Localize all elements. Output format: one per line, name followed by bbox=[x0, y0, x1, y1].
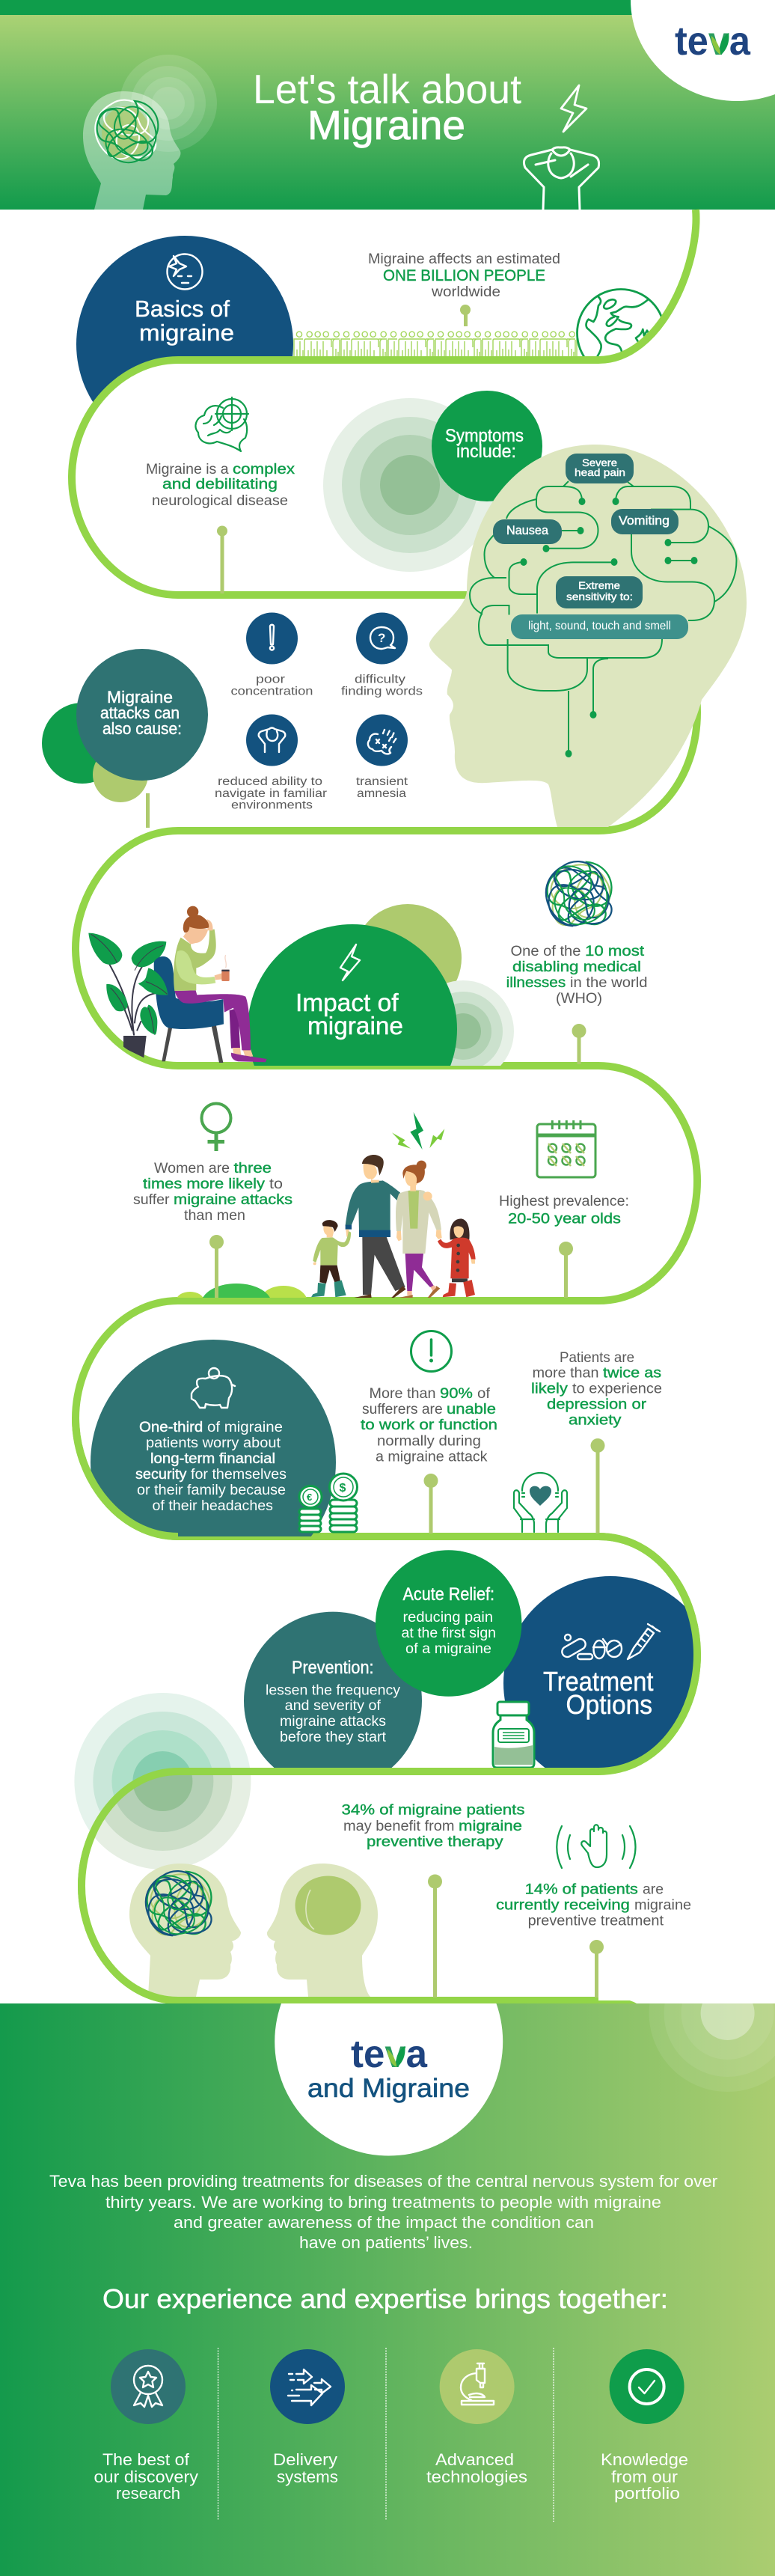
pin bbox=[559, 1242, 573, 1298]
icon: lightning bbox=[340, 944, 360, 980]
text: prevention: and severity of bbox=[285, 1698, 382, 1714]
stat: women three times: than men bbox=[184, 1208, 245, 1224]
icon: medicine bottle bbox=[493, 1702, 534, 1768]
stat: 34 percent: may benefit from bbox=[343, 1819, 459, 1834]
item: reduced ability to navigate: navigate in familiar bbox=[215, 787, 328, 800]
stat: twice as likely bbox=[531, 1350, 662, 1429]
concentric pulse bbox=[446, 980, 514, 1066]
stat: 34 percent: migraine bbox=[459, 1819, 522, 1834]
icon: face with pain bbox=[168, 254, 202, 289]
item: best of discovery research bbox=[94, 2349, 198, 2503]
text: acute relief: reducing pain bbox=[402, 1610, 493, 1626]
head silhouette bbox=[429, 445, 747, 827]
text: prevention bbox=[266, 1658, 401, 1745]
paragraph: thirty years. We are working to bring treatments to people with migraine bbox=[105, 2193, 661, 2212]
stat: women three times bbox=[133, 1161, 292, 1224]
symptoms circle: Symptoms bbox=[445, 426, 524, 446]
stat: 34 percent bbox=[341, 1802, 525, 1850]
paragraph bbox=[49, 2172, 717, 2252]
label: severe head pain bbox=[566, 454, 634, 483]
stat: 14 percent: migraine bbox=[634, 1898, 691, 1914]
stat: one billion people: worldwide bbox=[431, 284, 500, 300]
panel: head with symptoms bbox=[429, 445, 747, 827]
item: reduced ability to navigate: reduced ability to bbox=[218, 775, 322, 788]
panel: women and family bbox=[133, 1102, 628, 1298]
stat: top 10 disabling: illnesses bbox=[506, 975, 570, 991]
heading bbox=[543, 1666, 654, 1720]
white interior and pulse inside loop bbox=[85, 1771, 630, 2000]
stat: one billion people bbox=[368, 251, 560, 300]
heading bbox=[295, 989, 403, 1040]
decorative circles and stem bbox=[42, 703, 150, 828]
stat: 14 percent: are bbox=[643, 1881, 664, 1898]
icon: pills bbox=[560, 1635, 622, 1659]
head silhouette in header bbox=[83, 91, 180, 210]
text: one-third: security bbox=[135, 1467, 191, 1483]
text: prevention: lessen the frequency bbox=[266, 1682, 401, 1699]
item: transient amnesia bbox=[356, 714, 408, 800]
panel: migraine attacks can also cause bbox=[42, 612, 423, 828]
stat: one billion people: Migraine affects an estimated bbox=[368, 251, 560, 267]
item: best of discovery research: The best of bbox=[102, 2450, 190, 2469]
bushes bbox=[177, 1284, 307, 1298]
heading: Impact of bbox=[295, 989, 399, 1016]
concentric pulse in header bbox=[120, 55, 217, 152]
stat: highest prevalence: Highest prevalence: bbox=[499, 1194, 629, 1209]
stat: top 10 disabling: disabling medical bbox=[512, 959, 641, 975]
circuit dots bbox=[521, 498, 697, 757]
label: light, sound, touch and smell bbox=[511, 614, 688, 639]
concentric pulse behind symptoms bbox=[323, 398, 497, 572]
panel: complex disease: and debilitating bbox=[162, 477, 278, 492]
pin bbox=[591, 1438, 604, 1533]
text: one-third: of their headaches bbox=[153, 1498, 273, 1514]
label: vomiting: Vomiting bbox=[619, 513, 670, 528]
item: knowledge from portfolio bbox=[601, 2349, 688, 2503]
olive circle bbox=[354, 904, 462, 1012]
label: vomiting bbox=[611, 509, 678, 534]
pin bbox=[423, 1474, 438, 1533]
text: acute relief: at the first sign bbox=[401, 1626, 496, 1641]
title: Migraine bbox=[307, 102, 465, 148]
icon: globe bbox=[576, 288, 662, 356]
icon: female symbol bbox=[202, 1103, 230, 1151]
footer pulse bbox=[649, 2003, 775, 2092]
heading: Treatment bbox=[543, 1666, 654, 1697]
text: acute relief bbox=[401, 1584, 496, 1657]
footer panel bbox=[0, 2003, 775, 2576]
stat: top 10 disabling: (WHO) bbox=[556, 991, 602, 1007]
stat: twice as likely: anxiety bbox=[569, 1413, 622, 1429]
logo badge: teva bbox=[675, 19, 751, 64]
text: prevention: before they start bbox=[280, 1730, 387, 1745]
logo badge bbox=[631, 0, 775, 101]
paragraph: and greater awareness of the impact the condition can bbox=[174, 2213, 594, 2232]
stat: 14 percent: preventive treatment bbox=[528, 1914, 664, 1929]
stat: more than 90 percent: to work or function bbox=[361, 1417, 497, 1433]
item: difficulty finding words: finding words bbox=[341, 686, 423, 698]
item: delivery systems: systems bbox=[277, 2467, 338, 2486]
icon: tangled brain bbox=[142, 1870, 215, 1942]
stat: women three times: suffer bbox=[133, 1192, 174, 1208]
coin symbols: € bbox=[307, 1492, 312, 1503]
item: reduced ability to navigate bbox=[215, 714, 328, 811]
text: one-third: One-third bbox=[139, 1420, 207, 1435]
text: one-third bbox=[135, 1420, 287, 1514]
icon: hands holding heart bbox=[514, 1473, 567, 1532]
item: transient amnesia: amnesia bbox=[357, 787, 406, 800]
tangled scribble in header head bbox=[95, 100, 158, 162]
title: Let's talk about bbox=[253, 66, 521, 112]
brain circuit lines bbox=[470, 481, 736, 754]
pin bbox=[589, 1940, 604, 1997]
white badge with logo bbox=[275, 2003, 503, 2155]
text: one-third: of migraine bbox=[207, 1420, 283, 1435]
pin bbox=[460, 305, 471, 326]
item: poor concentration: poor bbox=[256, 674, 286, 686]
pin bbox=[572, 1024, 586, 1064]
item: delivery systems bbox=[270, 2349, 345, 2486]
item: knowledge from portfolio: Knowledge bbox=[601, 2450, 688, 2469]
paragraph: Teva has been providing treatments for diseases of the central nervous system for over bbox=[49, 2172, 717, 2191]
label: severe head pain: head pain bbox=[575, 466, 625, 478]
stat: top 10 disabling: 10 most bbox=[585, 944, 645, 959]
stat: more than 90 percent: of bbox=[477, 1386, 491, 1402]
stat: top 10 disabling: in the world bbox=[570, 975, 648, 991]
coin symbols bbox=[307, 1482, 346, 1503]
prevention circle bbox=[244, 1612, 422, 1768]
text: one-third: or their family because bbox=[137, 1483, 286, 1498]
item: poor concentration bbox=[230, 612, 313, 698]
stat: women three times: migraine attacks bbox=[174, 1192, 292, 1208]
section heading: Basics of bbox=[135, 296, 230, 322]
text: prevention: Prevention: bbox=[292, 1658, 374, 1678]
paragraph: have on patients’ lives. bbox=[299, 2233, 473, 2252]
icon: coins bbox=[299, 1474, 358, 1532]
text: one-third: long-term financial bbox=[150, 1451, 275, 1467]
pin bbox=[209, 1235, 224, 1298]
label: nausea: Nausea bbox=[506, 523, 549, 537]
symptoms circle: include: bbox=[456, 442, 516, 462]
item: difficulty finding words: ? bbox=[378, 631, 385, 645]
stat: more than 90 percent: unable bbox=[447, 1402, 496, 1417]
stat: twice as likely: twice as bbox=[603, 1365, 661, 1382]
symptoms circle bbox=[432, 391, 542, 501]
label: extreme sensitivity: Extreme bbox=[578, 579, 620, 591]
label: nausea bbox=[493, 519, 562, 544]
label: severe head pain: Severe bbox=[582, 457, 617, 468]
stat: 34 percent: preventive therapy bbox=[367, 1834, 503, 1850]
item: best of discovery research: research bbox=[116, 2484, 180, 2503]
icon: piggy bank bbox=[192, 1368, 235, 1408]
stat: more than 90 percent: sufferers are bbox=[362, 1402, 447, 1417]
text: Migraine is a bbox=[146, 462, 233, 477]
icon: lightning bolt bbox=[561, 85, 586, 132]
stat: top 10 disabling bbox=[506, 944, 648, 1007]
stat: 34 percent: 34% of migraine patients bbox=[341, 1802, 525, 1819]
stat: one billion people: ONE BILLION PEOPLE bbox=[383, 267, 545, 284]
green heading circle bbox=[248, 924, 457, 1066]
stat: more than 90 percent: a migraine attack bbox=[376, 1449, 488, 1465]
stat: 14 percent bbox=[496, 1881, 691, 1929]
stat: twice as likely: Patients are bbox=[560, 1350, 634, 1366]
white interior of second loop bbox=[72, 360, 673, 595]
section circle bbox=[76, 236, 293, 453]
item: poor concentration: concentration bbox=[230, 686, 313, 698]
label: extreme sensitivity bbox=[556, 576, 643, 608]
label: light, sound, touch and smell: light, sound, touch and smell bbox=[528, 620, 671, 632]
item: difficulty finding words: difficulty bbox=[355, 674, 405, 686]
icon: calm brain bbox=[295, 1875, 361, 1935]
label: extreme sensitivity: sensitivity to: bbox=[566, 590, 633, 602]
text: acute relief: of a migraine bbox=[405, 1641, 491, 1657]
panel: preventive therapy bbox=[74, 1536, 697, 2000]
text: acute relief: Acute Relief: bbox=[402, 1584, 494, 1605]
text: one-third: patients worry about bbox=[146, 1435, 281, 1451]
pin bbox=[217, 525, 227, 593]
item: advanced technologies bbox=[426, 2349, 527, 2486]
text: prevention: migraine attacks bbox=[280, 1714, 386, 1730]
coin symbols: $ bbox=[340, 1482, 346, 1495]
item: transient amnesia: transient bbox=[356, 775, 408, 788]
path segment around this panel bbox=[82, 1536, 697, 2000]
stat: more than 90 percent: More than bbox=[370, 1386, 440, 1402]
right head bbox=[267, 1864, 378, 1997]
teal heading circle bbox=[76, 649, 208, 781]
dotted separators bbox=[218, 2348, 554, 2522]
icon: calendar bbox=[537, 1120, 595, 1177]
icon: brain with target bbox=[196, 397, 248, 451]
item: reduced ability to navigate: environments bbox=[231, 799, 313, 811]
teva logo: teva bbox=[351, 2033, 428, 2076]
panel: basics of migraine bbox=[76, 236, 293, 453]
heading: Options bbox=[566, 1689, 652, 1720]
panel: impact of migraine bbox=[88, 861, 646, 1066]
pin bbox=[428, 1874, 442, 1997]
stat: 14 percent: currently receiving bbox=[496, 1898, 634, 1914]
panel: financial and work impact bbox=[72, 1330, 661, 1540]
item: advanced technologies: Advanced bbox=[435, 2450, 514, 2469]
item: delivery systems: Delivery bbox=[273, 2450, 337, 2469]
row of people bbox=[293, 331, 578, 357]
stat: women three times: three bbox=[233, 1161, 272, 1176]
text: complex bbox=[233, 462, 295, 477]
section heading: migraine bbox=[139, 320, 234, 346]
icon: stop hand with waves bbox=[557, 1825, 636, 1868]
heading: migraine bbox=[307, 1012, 403, 1040]
item: advanced technologies: technologies bbox=[426, 2467, 527, 2486]
section heading bbox=[135, 296, 234, 346]
illustration: woman on chair with plant bbox=[88, 906, 267, 1063]
teal heading circle: attacks can bbox=[100, 703, 180, 722]
panel: treatment options bbox=[74, 1550, 717, 1870]
footer heading: and Migraine bbox=[307, 2074, 470, 2103]
subheading: Our experience and expertise brings together: bbox=[102, 2283, 668, 2314]
icon: syringe bbox=[628, 1624, 660, 1659]
stat: 14 percent: 14% of patients bbox=[525, 1881, 643, 1898]
stat: twice as likely: depression or bbox=[547, 1397, 647, 1413]
stat: women three times: Women are bbox=[154, 1161, 233, 1176]
item: knowledge from portfolio: from our bbox=[611, 2467, 678, 2486]
left head bbox=[129, 1864, 241, 1997]
icon: person holding head bbox=[524, 147, 599, 210]
teal circle bbox=[91, 1340, 336, 1536]
panel: complex disease: neurological disease bbox=[152, 493, 288, 509]
stat: highest prevalence: 20-50 year olds bbox=[508, 1212, 621, 1227]
stat: women three times: to bbox=[269, 1176, 283, 1192]
icon: tangle bbox=[542, 861, 615, 933]
lower pulse outside loop bbox=[74, 1693, 251, 1870]
winding path bbox=[72, 210, 697, 2007]
stat: women three times: times more likely bbox=[143, 1176, 269, 1192]
illustration: family bbox=[311, 1112, 476, 1298]
item: knowledge from portfolio: portfolio bbox=[614, 2484, 680, 2503]
teal heading circle: also cause: bbox=[102, 719, 182, 738]
treatment circle bbox=[503, 1576, 693, 1768]
teal heading circle: Migraine bbox=[107, 688, 173, 706]
stat: more than 90 percent bbox=[361, 1386, 497, 1465]
stat: top 10 disabling: One of the bbox=[510, 944, 585, 959]
text: one-third: for themselves bbox=[191, 1467, 287, 1483]
item: difficulty finding words bbox=[341, 612, 423, 698]
item: best of discovery research: our discovery bbox=[94, 2467, 198, 2486]
acute relief circle bbox=[376, 1550, 521, 1697]
stat: twice as likely: to experience bbox=[572, 1382, 662, 1397]
panel: complex disease bbox=[146, 397, 295, 593]
stat: highest prevalence bbox=[499, 1194, 629, 1227]
stat: twice as likely: more than bbox=[533, 1365, 603, 1382]
stat: twice as likely: likely bbox=[531, 1382, 572, 1397]
icon: exclamation circle bbox=[411, 1331, 452, 1371]
header banner bbox=[0, 0, 775, 210]
title bbox=[253, 66, 521, 148]
stat: more than 90 percent: 90% bbox=[440, 1386, 477, 1402]
stat: more than 90 percent: normally during bbox=[377, 1434, 481, 1449]
